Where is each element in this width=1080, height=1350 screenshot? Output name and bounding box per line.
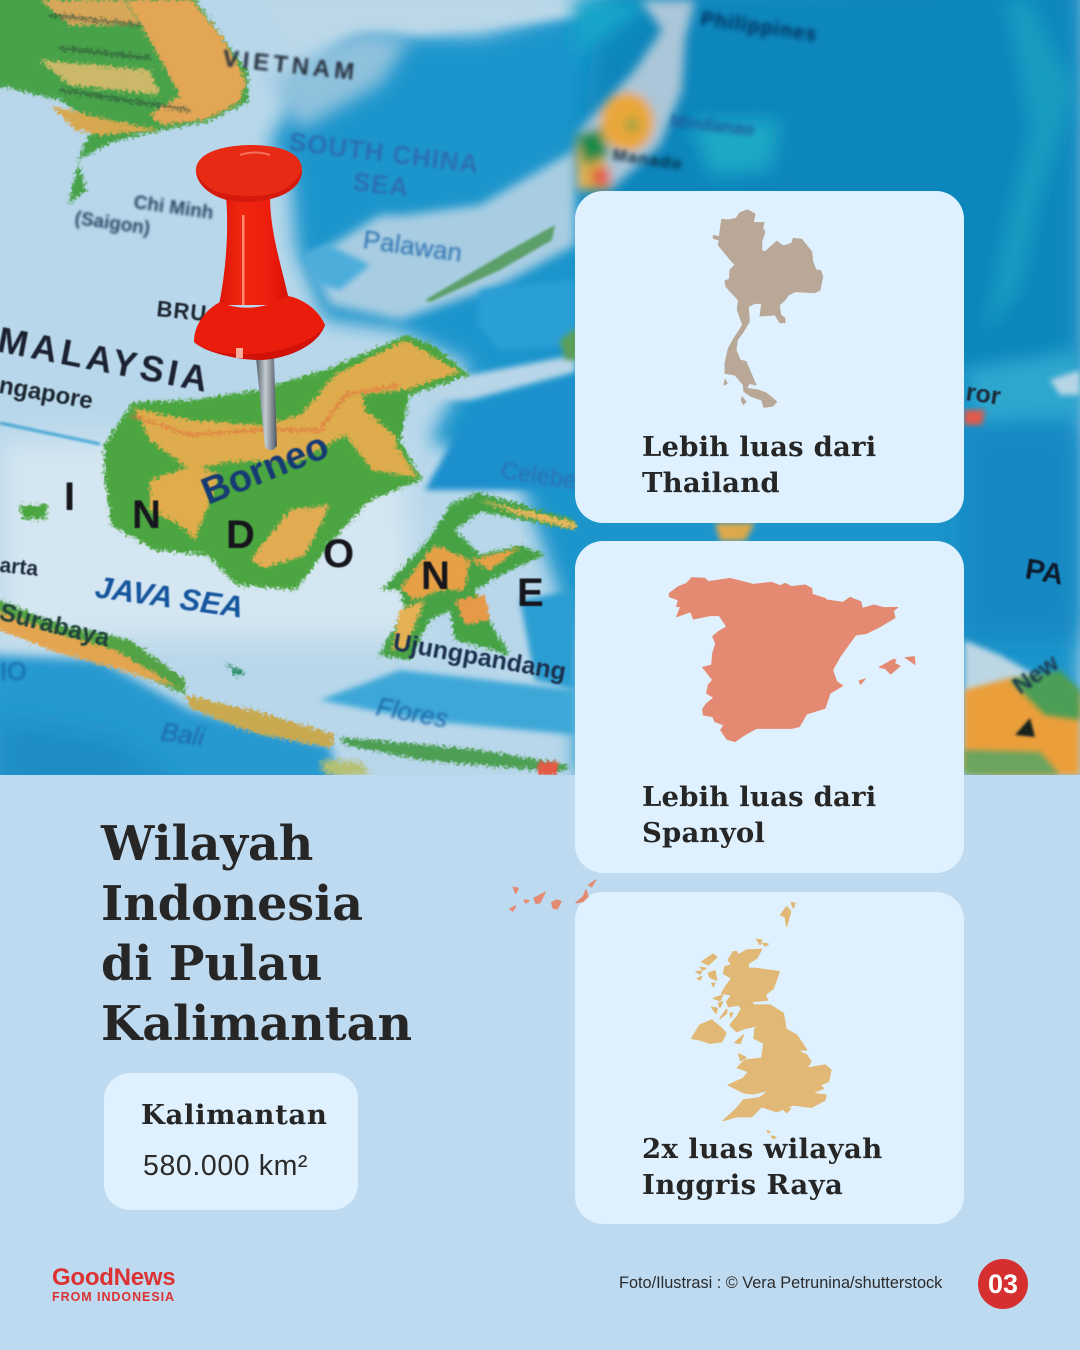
- map labels: PA: [1023, 553, 1066, 592]
- map labels: SEA: [351, 166, 411, 203]
- map: Sulawesi island: [378, 492, 575, 660]
- icon: map of Thailand: [712, 210, 824, 408]
- label: Kalimantan: Kalimantan: [141, 1099, 328, 1131]
- map: Philippines in soft focus: [575, 0, 695, 190]
- map labels: New: [1008, 649, 1064, 700]
- map: water layers: [0, 0, 1080, 790]
- map: Palawan and Sabah strip: [425, 225, 580, 360]
- text: 2x luas wilayah Inggris Raya: Inggris Raya: [642, 1168, 843, 1200]
- text: Lebih luas dari Thailand: Thailand: [642, 466, 780, 498]
- map labels: Philippines: [699, 8, 819, 46]
- map labels: Flores: [374, 691, 450, 733]
- value: area in square kilometres: 580.000 km²: [143, 1150, 308, 1182]
- map labels: O: [323, 532, 354, 576]
- map: Indochina landmass: [0, 0, 248, 205]
- text: Lebih luas dari Thailand: Lebih luas dari: [642, 431, 876, 463]
- map labels: IO: [0, 658, 26, 686]
- map labels: (Saigon): [73, 208, 151, 240]
- map labels: Mindanao: [670, 111, 755, 140]
- map labels: ror: [964, 378, 1003, 411]
- bottom section background: [0, 775, 1080, 1350]
- title: Indonesia: [101, 876, 363, 932]
- map labels: Ujungpandang: [391, 628, 568, 686]
- icon: map of the United Kingdom and Spanish Canary islands: [509, 879, 832, 1140]
- title: [100, 816, 412, 1052]
- title: Kalimantan: [101, 996, 412, 1052]
- title: Wilayah: [101, 816, 313, 872]
- panel: Kalimantan area: [104, 1073, 358, 1210]
- text: 2x luas wilayah Inggris Raya: 2x luas wilayah: [642, 1133, 883, 1165]
- text: Lebih luas dari Spanyol: [642, 781, 876, 848]
- map labels: I: [64, 475, 75, 519]
- text: 2x luas wilayah Inggris Raya: [642, 1133, 883, 1200]
- map labels: Manado: [611, 145, 684, 174]
- map labels: Palawan: [361, 224, 464, 268]
- panel: Thailand comparison: [575, 191, 964, 523]
- map labels: Surabaya: [0, 598, 114, 653]
- text: Lebih luas dari Spanyol: Spanyol: [642, 816, 765, 848]
- panel: United Kingdom comparison: [575, 892, 964, 1224]
- page number badge: [978, 1259, 1028, 1309]
- text: Lebih luas dari Thailand: [642, 431, 876, 498]
- map labels: D: [226, 513, 255, 557]
- map labels: E: [517, 571, 544, 615]
- map: Java and Lesser Sunda chain: [0, 598, 570, 775]
- map labels: [0, 8, 1066, 752]
- map labels: Celebes: [499, 457, 590, 496]
- panel: Spain comparison: [575, 541, 964, 873]
- map labels: Borneo: [196, 425, 335, 513]
- map labels: N: [421, 554, 450, 598]
- map: Borneo island: [20, 335, 470, 590]
- map: Timor spot and New Guinea: [964, 410, 1080, 775]
- map labels: N: [132, 493, 161, 537]
- map labels: JAVA SEA: [93, 569, 246, 625]
- logo: GoodNews from Indonesia: FROM INDONESIA: [52, 1290, 175, 1304]
- logo: GoodNews from Indonesia: GoodNews: [52, 1264, 175, 1291]
- map: strip of land between the first two cards: [715, 523, 755, 541]
- map labels: VIETNAM: [221, 45, 359, 86]
- page number badge: 03: [988, 1269, 1018, 1299]
- map labels: SOUTH CHINA: [287, 126, 481, 179]
- map labels: Chi Minh: [132, 192, 215, 224]
- logo: GoodNews from Indonesia: [52, 1264, 175, 1304]
- icon: red push pin: [194, 145, 325, 450]
- photo credit: Foto/Ilustrasi : © Vera Petrunina/shutterstock: [619, 1274, 942, 1292]
- map labels: Bali: [159, 716, 207, 752]
- text: Lebih luas dari Spanyol: Lebih luas dari: [642, 781, 876, 813]
- map labels: MALAYSIA: [0, 319, 215, 400]
- title: di Pulau: [101, 936, 322, 992]
- icon: map of Spain: [668, 577, 916, 742]
- map labels: BRU: [155, 296, 208, 326]
